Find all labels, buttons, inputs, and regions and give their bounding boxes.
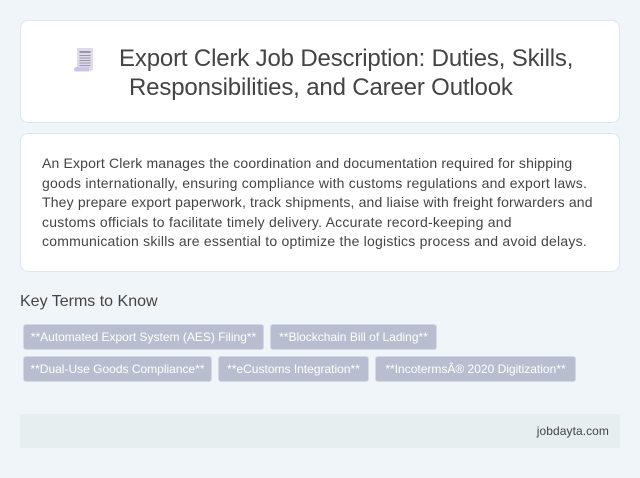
tag: eCustoms integration: **eCustoms Integration**: [227, 362, 360, 376]
title: [119, 45, 573, 101]
panel: description card: [20, 133, 620, 272]
text block: description: [42, 155, 593, 249]
panel: title card: [20, 20, 620, 123]
footer bar: [20, 414, 620, 448]
text block: description: communication skills are essential to optimize the logistics process and avoid delays.: [42, 233, 587, 249]
tag: AES filing: **Automated Export System (AES) Filing**: [31, 330, 256, 344]
tag: AES filing: [23, 324, 264, 350]
title: Responsibilities, and Career Outlook: [129, 74, 513, 101]
text block: description: goods internationally, ensuring compliance with customs regulations and export laws.: [42, 174, 587, 190]
tag: Incoterms: [375, 356, 576, 382]
heading: key terms: Key Terms to Know: [20, 293, 158, 310]
text block: description: An Export Clerk manages the coordination and documentation required for shipping: [42, 155, 572, 171]
icon: paper receipt document: [74, 48, 93, 72]
title: Export Clerk Job Description: Duties, Skills,: [119, 45, 573, 72]
tag: eCustoms integration: [218, 356, 369, 382]
text block: description: customs officials to facilitate timely delivery. Accurate record-keeping and: [42, 214, 512, 230]
footer text: jobdayta.com: [537, 424, 609, 438]
tag: dual-use goods: **Dual-Use Goods Compliance**: [30, 362, 205, 376]
tag list: key terms: [23, 324, 576, 382]
tag: blockchain bill of lading: **Blockchain Bill of Lading**: [279, 330, 428, 344]
text block: description: They prepare export paperwork, track shipments, and liaise with freight forwarders and: [42, 194, 593, 210]
tag: blockchain bill of lading: [270, 324, 437, 350]
tag: Incoterms: **IncotermsÂ® 2020 Digitization**: [385, 362, 566, 376]
tag: dual-use goods: [23, 356, 212, 382]
